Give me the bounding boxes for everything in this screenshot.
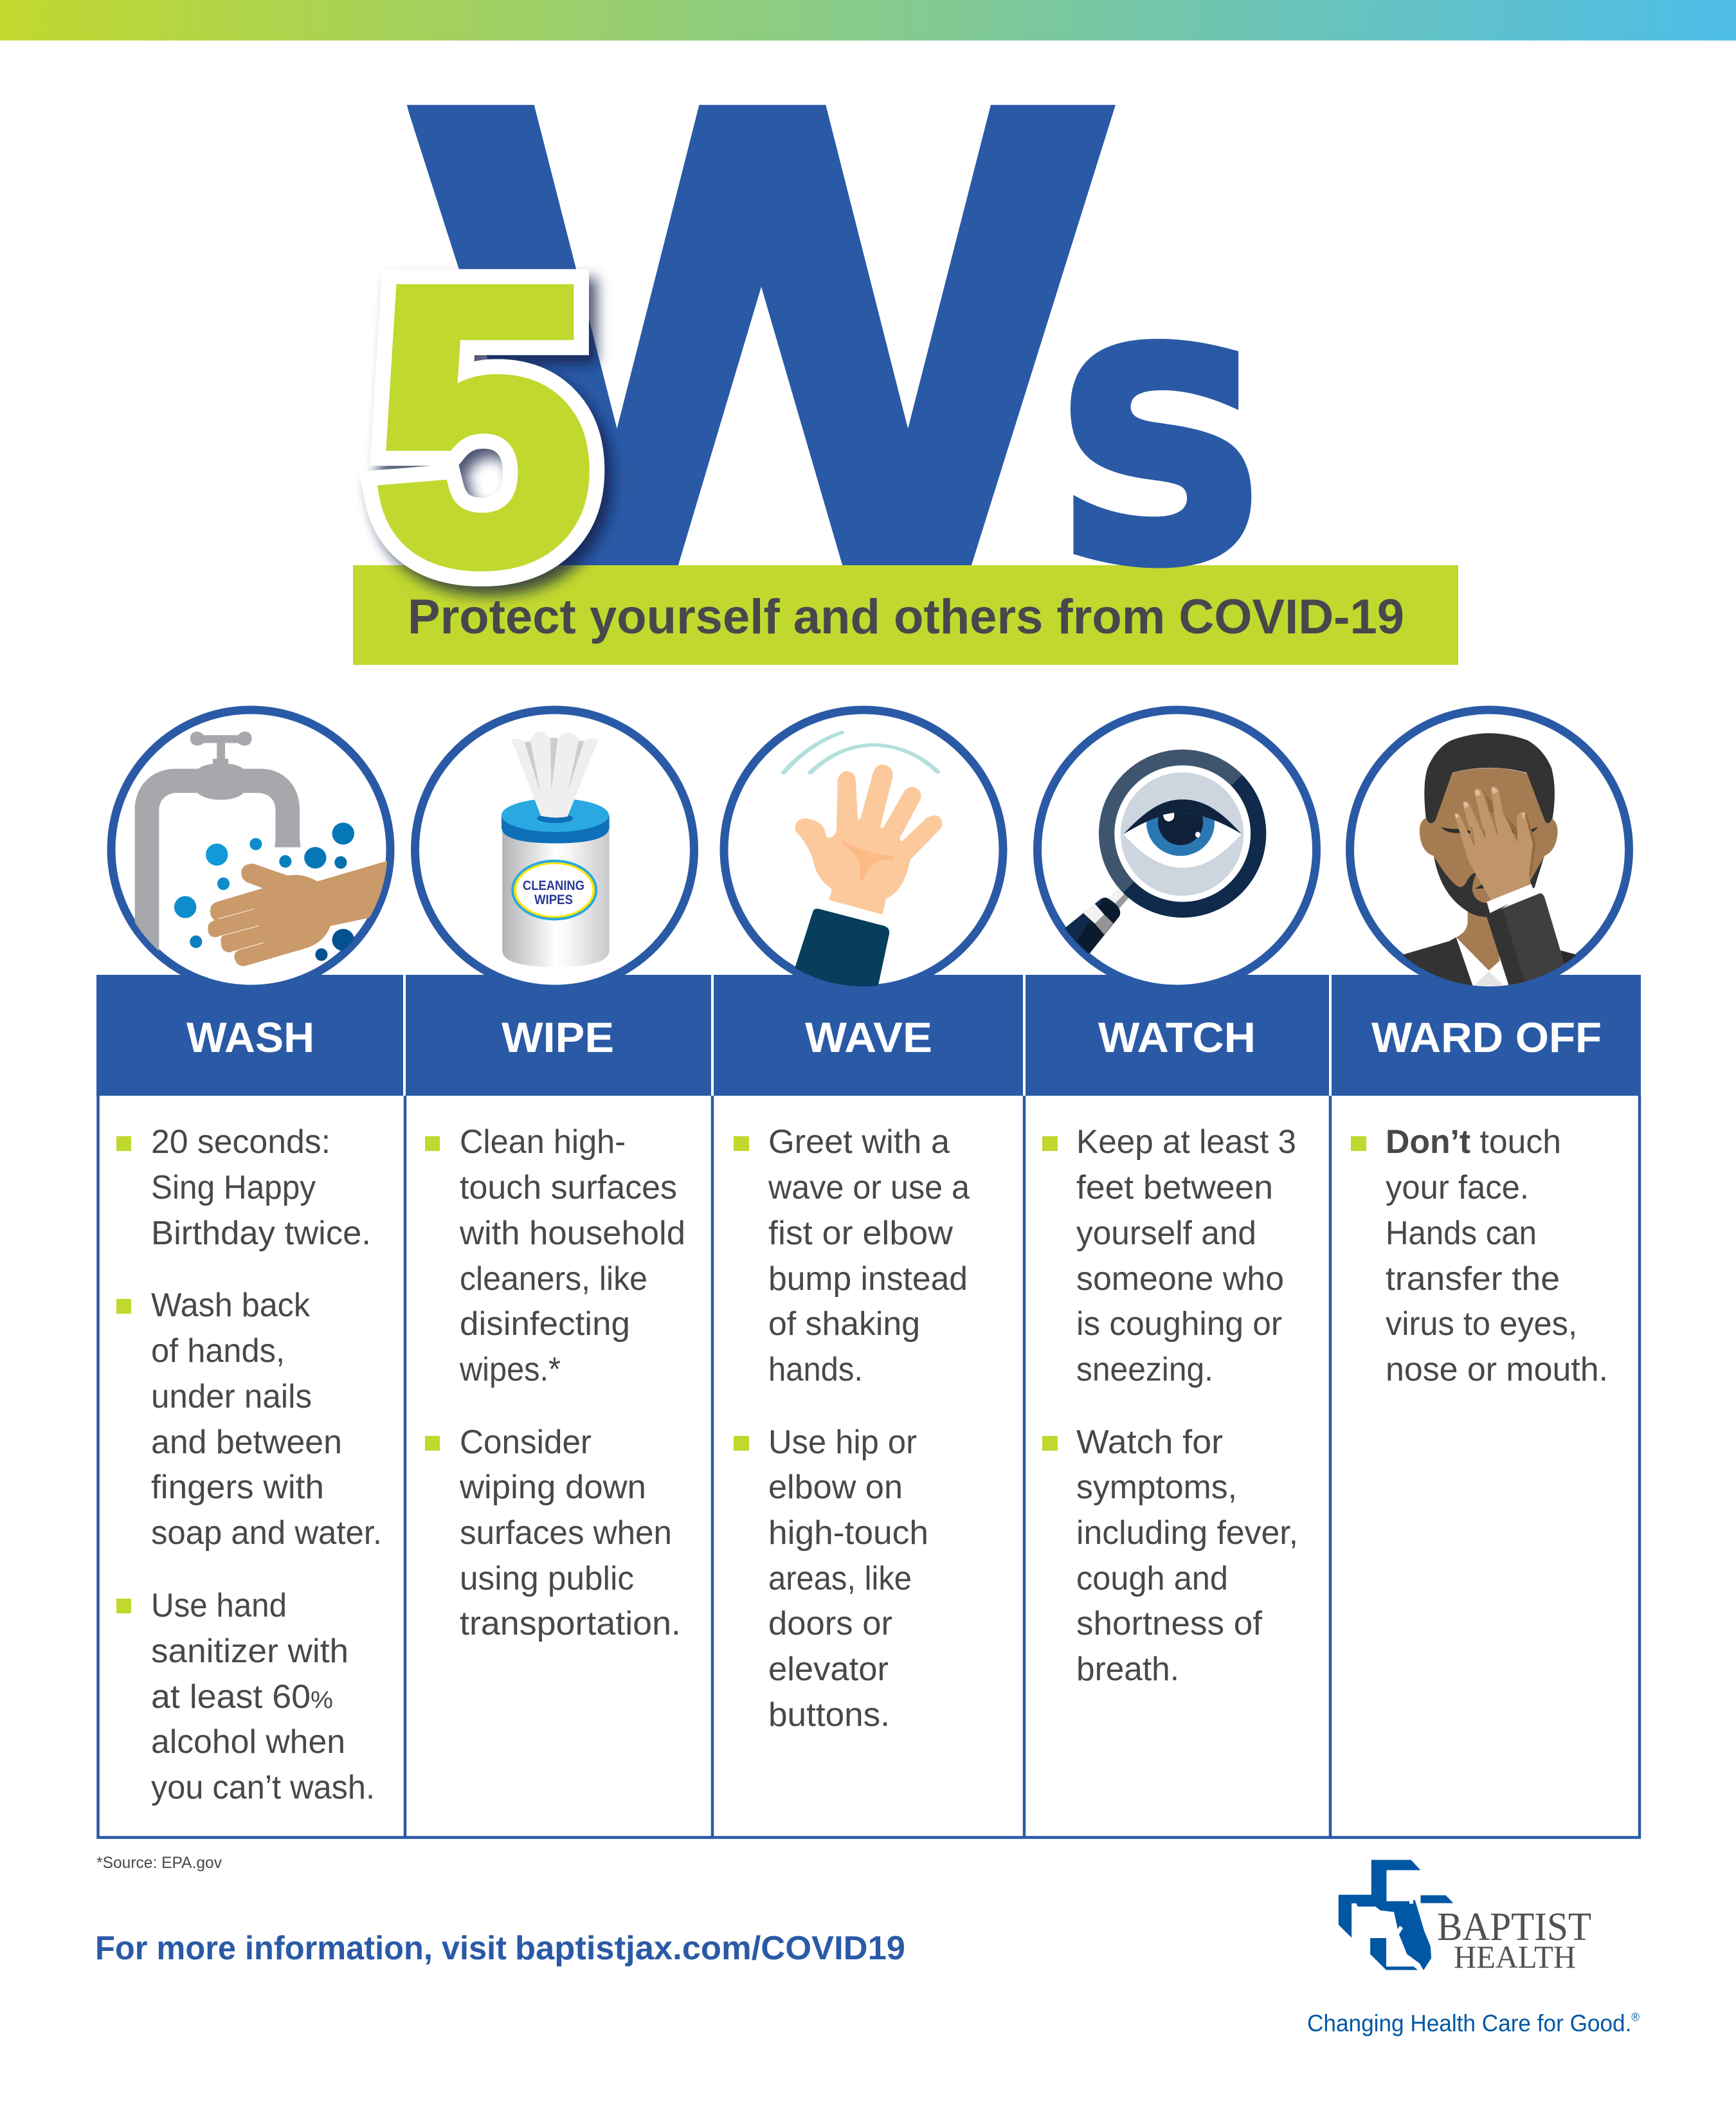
tagline: Changing Health Care for Good. xyxy=(1307,2010,1649,2036)
body text: wash: Birthday twice. xyxy=(151,1215,371,1252)
subtitle: Protect yourself and others from COVID-19 xyxy=(408,590,1404,644)
call to action: baptistjax.com/COVID19 xyxy=(515,1930,905,1967)
body text: watch: feet between xyxy=(1076,1169,1273,1206)
numeral 5: 5 xyxy=(375,209,592,642)
icon: man touching face xyxy=(1350,710,1629,989)
body text: watch: sneezing. xyxy=(1076,1351,1213,1388)
body text: wave: Use hip or xyxy=(768,1424,917,1461)
body text: wave: fist or elbow xyxy=(768,1215,953,1252)
body text: ward off xyxy=(1351,1123,1608,1388)
icon: waving hand xyxy=(724,710,1003,989)
body text: watch: cough and xyxy=(1076,1560,1228,1597)
body text: wash: of hands, xyxy=(151,1332,285,1370)
body text: watch: symptoms, xyxy=(1076,1469,1237,1506)
body text: wipe: surfaces when xyxy=(460,1514,672,1552)
body text: wipe: wiping down xyxy=(459,1469,646,1506)
panel: wash xyxy=(96,710,403,1806)
body text: wave: areas, like xyxy=(768,1560,912,1597)
letter s: s xyxy=(1055,199,1265,651)
body text: wash: Use hand xyxy=(151,1587,287,1624)
canister label text: WIPES xyxy=(534,893,573,907)
title: 5Ws xyxy=(353,0,1458,712)
logo wordmark xyxy=(1437,1905,1591,1975)
body text: wipe xyxy=(425,1123,685,1642)
header: wave: WAVE xyxy=(805,1013,932,1061)
table grid lines xyxy=(98,1096,1640,1838)
panel: watch xyxy=(1026,710,1329,1688)
body text: wave: buttons. xyxy=(768,1696,890,1734)
body text: wave: Greet with a xyxy=(768,1123,950,1161)
body text: wipe: disinfecting xyxy=(460,1305,630,1343)
body text: watch: breath. xyxy=(1076,1651,1179,1688)
body text: ward off: transfer the xyxy=(1386,1260,1560,1298)
body text: wipe: transportation. xyxy=(460,1605,681,1642)
logo wordmark: BAPTIST xyxy=(1437,1905,1591,1949)
header: wash: WASH xyxy=(186,1013,314,1061)
body text: watch: including fever, xyxy=(1076,1514,1298,1552)
body text: wash: you can’t wash. xyxy=(151,1769,375,1806)
body text: watch: shortness of xyxy=(1076,1605,1263,1642)
body text: ward off: your face. xyxy=(1386,1169,1529,1206)
body text: wipe: Consider xyxy=(460,1424,592,1461)
icon: magnifying glass over eye xyxy=(1038,710,1317,989)
body text: wash: alcohol when xyxy=(151,1723,345,1761)
body text: wave: elevator xyxy=(768,1651,889,1688)
body text: wave: of shaking xyxy=(768,1305,920,1343)
source note: *Source: EPA.gov xyxy=(96,1854,222,1872)
body text: watch: yourself and xyxy=(1076,1215,1256,1252)
body text: wipe: with household xyxy=(459,1215,685,1252)
body text: wash: at least 60% xyxy=(151,1678,333,1716)
body text: wipe: using public xyxy=(460,1560,634,1597)
header: wipe xyxy=(406,975,711,1096)
top gradient bar xyxy=(0,0,1736,41)
logo: Baptist Health xyxy=(1339,1860,1591,1975)
body text: wave: doors or xyxy=(768,1605,892,1642)
big letter W: W xyxy=(390,0,1135,712)
header: watch xyxy=(1026,975,1329,1096)
numeral 5: 5 xyxy=(375,209,592,642)
body text: wash: soap and water. xyxy=(151,1514,382,1552)
header: ward off: WARD OFF xyxy=(1371,1013,1602,1061)
body text: wash: under nails xyxy=(151,1378,312,1415)
body text: wave: bump instead xyxy=(768,1260,968,1298)
body text: wash: Sing Happy xyxy=(151,1169,316,1206)
body text: wipe: Clean high- xyxy=(460,1123,626,1161)
body text: watch: someone who xyxy=(1076,1260,1284,1298)
header: wave xyxy=(714,975,1023,1096)
body text: wave: hands. xyxy=(768,1351,863,1388)
body text: wash: fingers with xyxy=(151,1469,324,1506)
icon: cleaning wipes canister xyxy=(415,710,694,989)
body text: wipe: wipes.* xyxy=(459,1351,561,1388)
body text: wave: high-touch xyxy=(768,1514,928,1552)
body text: wipe: cleaners, like xyxy=(460,1260,647,1298)
panel: wipe xyxy=(406,710,711,1642)
body text: ward off: nose or mouth. xyxy=(1386,1351,1608,1388)
logo wordmark: HEALTH xyxy=(1454,1939,1576,1975)
body text: wipe: touch surfaces xyxy=(460,1169,677,1206)
body text: wash: sanitizer with xyxy=(151,1633,348,1670)
body text: wash: 20 seconds: xyxy=(151,1123,330,1161)
header: watch: WATCH xyxy=(1098,1013,1256,1061)
body text: watch xyxy=(1042,1123,1298,1688)
body text: watch: Keep at least 3 xyxy=(1076,1123,1296,1161)
tagline: ® xyxy=(1631,2011,1640,2024)
canister label text xyxy=(523,878,584,907)
body text: watch: Watch for xyxy=(1076,1424,1223,1461)
call to action xyxy=(95,1930,905,1967)
header: wash xyxy=(96,975,403,1096)
body text: ward off: Hands can xyxy=(1386,1215,1537,1252)
header: wipe: WIPE xyxy=(502,1013,614,1061)
body text: ward off: virus to eyes, xyxy=(1386,1305,1577,1343)
body text: ward off: Don’t touch xyxy=(1386,1123,1561,1161)
body text: wash: and between xyxy=(151,1424,342,1461)
body text: wave: wave or use a xyxy=(768,1169,970,1206)
icon: faucet and washing hand xyxy=(111,710,395,989)
canister label text: CLEANING xyxy=(523,878,584,893)
header: ward off xyxy=(1332,975,1641,1096)
body text: wave: elbow on xyxy=(768,1469,903,1506)
panel: ward off xyxy=(1332,710,1641,1388)
call to action: For more information, visit xyxy=(95,1930,507,1967)
body text: wash xyxy=(116,1123,382,1806)
panel: wave xyxy=(714,710,1023,1734)
body text: wash: Wash back xyxy=(151,1287,311,1324)
body text: wave xyxy=(734,1123,970,1734)
logo mark xyxy=(1339,1860,1453,1970)
body text: watch: is coughing or xyxy=(1076,1305,1282,1343)
subtitle band xyxy=(353,565,1458,665)
